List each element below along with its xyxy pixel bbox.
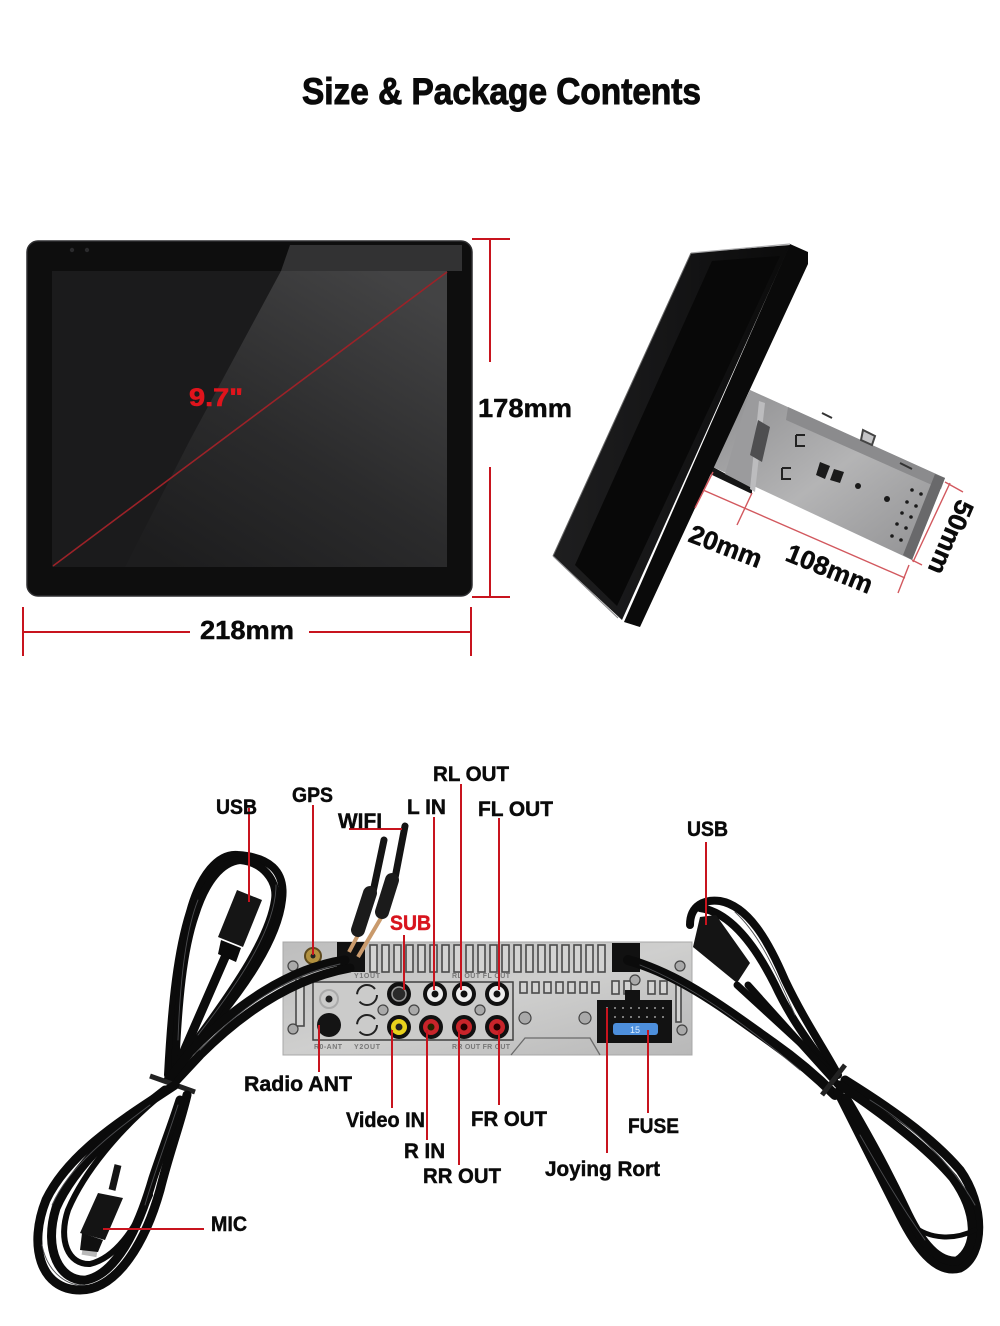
connector labels: MIC <box>211 1213 247 1236</box>
cable to panel <box>628 960 835 1095</box>
radio antenna socket <box>317 1013 341 1037</box>
lower loop <box>38 1085 187 1290</box>
panel port captions: RR OUT FR OUT <box>452 1044 511 1051</box>
connector labels: FUSE <box>628 1115 679 1138</box>
connector labels: GPS <box>292 784 333 807</box>
screen face <box>553 245 790 620</box>
screws <box>288 961 687 1035</box>
upper loop <box>690 901 838 1075</box>
rear connector panel <box>283 942 692 1055</box>
diagonal size label: 9.7" <box>189 384 243 412</box>
side view of unit with chassis <box>553 244 945 627</box>
camera dots <box>70 248 89 252</box>
width dimension 218mm: 218mm <box>200 615 294 645</box>
cable to panel <box>172 968 350 1085</box>
panel port captions: Y2OUT <box>354 1044 381 1051</box>
GPS connector <box>305 948 321 964</box>
panel port captions: R0-ANT <box>314 1044 343 1051</box>
unused ports <box>320 985 377 1035</box>
connector labels: RR OUT <box>423 1165 501 1188</box>
connector labels: FR OUT <box>471 1108 547 1131</box>
MIC plug <box>80 1193 123 1240</box>
USB plug <box>178 955 226 1065</box>
right USB cable bundle <box>628 901 979 1269</box>
connector recess <box>313 982 513 1040</box>
heat sink fins <box>296 945 681 1026</box>
blue fuse <box>613 1023 658 1035</box>
20mm label: 20mm <box>685 519 767 574</box>
screen side edge <box>624 244 808 627</box>
left USB and MIC cable bundle <box>38 855 350 1290</box>
top bezel glare <box>281 245 462 271</box>
display area <box>52 271 447 567</box>
connector labels: SUB <box>390 912 431 935</box>
connector labels: USB <box>216 796 257 819</box>
connector labels: L IN <box>407 796 446 819</box>
width dimension 218mm <box>23 607 471 656</box>
connector labels: USB <box>687 818 728 841</box>
power plug blocks <box>337 942 365 972</box>
metal chassis <box>710 390 945 560</box>
height dimension 178mm: 178mm <box>478 393 572 423</box>
side dimension lines <box>685 472 980 600</box>
108mm label: 108mm <box>782 538 877 600</box>
diagonal measure line <box>53 272 447 566</box>
panel port captions: RL OUT FL OUT <box>452 973 511 980</box>
panel port captions: Y1OUT <box>354 973 381 980</box>
connector labels: WIFI <box>338 810 382 833</box>
connector labels: FL OUT <box>478 798 553 821</box>
title: Size & Package Contents <box>302 71 701 112</box>
red connector leader lines <box>103 784 706 1229</box>
USB plug <box>693 915 750 983</box>
Joying port: 15 <box>630 1025 640 1035</box>
connector labels: RL OUT <box>433 763 509 786</box>
Joying port <box>597 990 672 1043</box>
panel port captions <box>314 973 511 1051</box>
glare reflection <box>125 271 447 567</box>
connector labels: Radio ANT <box>244 1073 352 1096</box>
connector labels <box>211 763 728 1236</box>
bottom trapezoid <box>511 1038 600 1055</box>
screen bezel <box>27 241 472 596</box>
upper loop <box>168 855 283 1075</box>
lower loop <box>838 1080 979 1269</box>
RCA sockets <box>387 982 509 1039</box>
cable tie <box>822 1065 845 1095</box>
connector labels: Video IN <box>346 1109 425 1132</box>
connector labels: Joying Rort <box>545 1158 660 1181</box>
50mm label: 50mm <box>922 496 980 579</box>
cable tie <box>150 1076 195 1092</box>
height dimension 178mm <box>472 239 572 597</box>
connector labels: R IN <box>404 1140 445 1163</box>
metal plate <box>283 942 692 1055</box>
front view of 9.7 inch screen <box>27 241 472 596</box>
WIFI antenna wires <box>349 826 405 957</box>
